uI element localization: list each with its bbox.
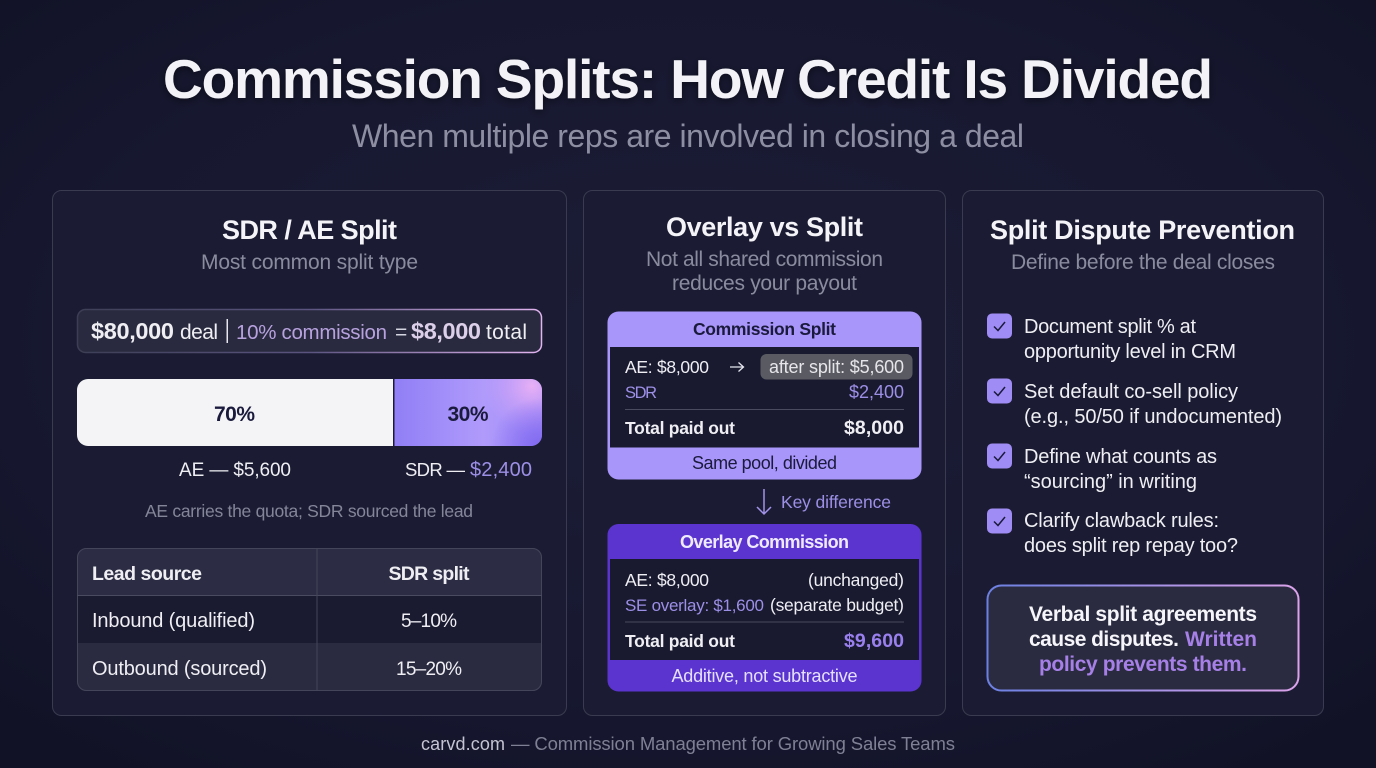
deal summary pill: 10% commission [236, 321, 387, 344]
card: overlay commission: $9,600 [844, 630, 904, 652]
checklist item 1: opportunity level in CRM [1024, 341, 1236, 363]
card: overlay commission [608, 524, 922, 692]
checklist item 3: Define what counts as [1024, 446, 1217, 468]
panel: SDR / AE split [52, 190, 566, 716]
split amounts: $2,400 [470, 459, 532, 481]
card: overlay commission: (separate budget) [770, 595, 904, 615]
subheading: reduces your payout [672, 272, 857, 295]
card: overlay commission: SE overlay: $1,600 [625, 596, 764, 615]
footer: — Commission Management for Growing Sales Teams [511, 733, 955, 754]
split note: AE carries the quota; SDR sourced the lead [145, 501, 473, 521]
checklist item 3 [987, 444, 1217, 493]
subheading: Define before the deal closes [1011, 251, 1275, 274]
deal summary pill: total [486, 321, 527, 344]
subheading [646, 248, 883, 295]
card: overlay commission: (unchanged) [808, 570, 904, 590]
callout: written policy: cause disputes. [1029, 628, 1179, 651]
table: lead source vs SDR split: Outbound (sourced) [92, 658, 267, 680]
card: overlay commission: Overlay Commission [680, 532, 849, 552]
deal summary pill: $8,000 [411, 318, 481, 344]
heading: SDR / AE Split: SDR / AE Split [222, 215, 397, 245]
table: lead source vs SDR split: Lead source [92, 563, 202, 585]
checklist item 1: Document split % at [1024, 316, 1196, 338]
card: commission split: Total paid out [625, 418, 735, 438]
callout: written policy: policy prevents them. [1039, 653, 1247, 676]
table: lead source vs SDR split: Inbound (qualified) [92, 610, 255, 632]
title: Commission Splits: How Credit Is Divided [163, 48, 1213, 110]
card: commission split: $8,000 [844, 417, 904, 439]
split amounts [179, 459, 532, 481]
heading: Split Dispute Prevention: Split Dispute Prevention [990, 215, 1295, 245]
card: overlay commission: Additive, not subtractive [672, 666, 858, 686]
deal summary pill: $80,000 [91, 318, 174, 344]
checklist item 4 [987, 508, 1238, 557]
subheading: Most common split type [201, 251, 418, 274]
footer: carvd.com [421, 734, 505, 754]
checklist item 2 [987, 378, 1282, 428]
split bar 70/30: 70% [214, 403, 255, 426]
card: commission split: AE: $8,000 [625, 357, 709, 377]
card: commission split: Same pool, divided [692, 453, 837, 473]
card: overlay commission: Total paid out [625, 631, 735, 651]
callout: written policy: Written [1185, 628, 1257, 651]
heading: Overlay vs Split: Overlay vs Split [666, 212, 863, 242]
arrow: key difference [757, 489, 891, 514]
panel: overlay vs split [584, 190, 946, 716]
table: lead source vs SDR split [77, 548, 542, 691]
callout: written policy [988, 586, 1298, 690]
checklist item 2: Set default co-sell policy [1024, 381, 1238, 403]
checklist item 1 [987, 314, 1236, 363]
deal summary pill: = [395, 321, 407, 344]
checklist item 4: Clarify clawback rules: [1024, 510, 1219, 532]
split bar 70/30: 30% [448, 403, 489, 426]
deal summary pill: deal [180, 321, 218, 344]
checklist item 4: does split rep repay too? [1024, 535, 1238, 557]
card: commission split: SDR [625, 384, 657, 402]
panel: split dispute prevention [962, 190, 1324, 716]
deal summary pill [78, 310, 542, 352]
split amounts: SDR — [405, 459, 466, 480]
card: commission split: after split: $5,600 [769, 357, 904, 377]
card: commission split [608, 312, 922, 480]
arrow: AE to after split [730, 362, 744, 372]
table: lead source vs SDR split: 5–10% [401, 611, 457, 632]
split bar 70/30 [77, 379, 542, 446]
subheading: Not all shared commission [646, 248, 883, 271]
subtitle: When multiple reps are involved in closing a deal [352, 118, 1024, 154]
arrow: key difference: Key difference [781, 492, 891, 512]
card: commission split: Commission Split [693, 319, 836, 339]
card: overlay commission: AE: $8,000 [625, 570, 709, 590]
checklist item 3: “sourcing” in writing [1024, 471, 1197, 493]
table: lead source vs SDR split: SDR split [388, 563, 470, 585]
split amounts: AE — $5,600 [179, 460, 291, 481]
table: lead source vs SDR split: 15–20% [396, 659, 462, 680]
checklist item 2: (e.g., 50/50 if undocumented) [1024, 406, 1282, 428]
callout: written policy: Verbal split agreements [1029, 603, 1257, 626]
card: commission split: $2,400 [849, 382, 904, 402]
